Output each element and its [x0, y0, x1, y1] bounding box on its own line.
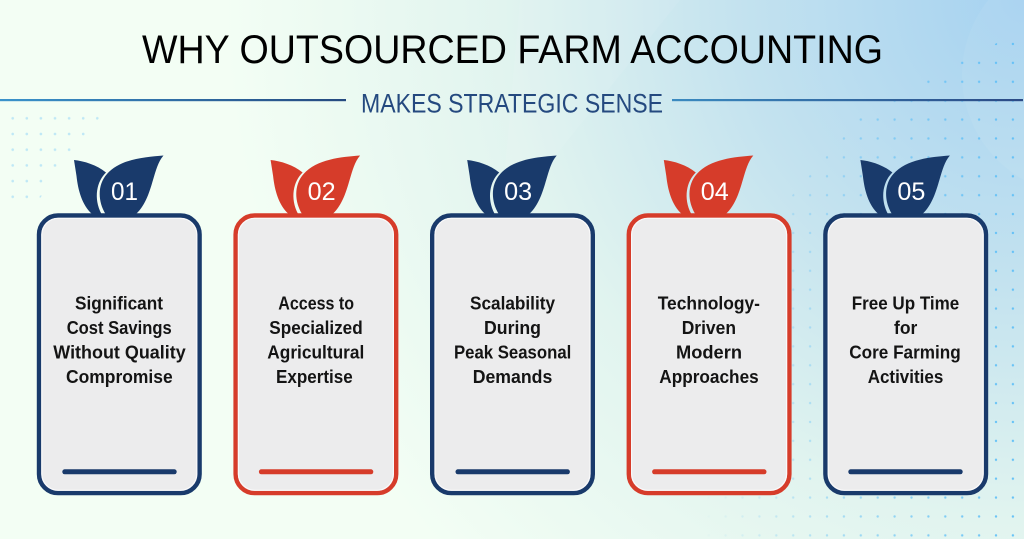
leaf icon 01: 01 — [111, 178, 138, 206]
accent bar — [652, 469, 766, 474]
card text: Access to — [278, 292, 354, 314]
accent bar — [62, 469, 177, 474]
card 1 — [39, 156, 200, 493]
card text: Technology- — [658, 292, 760, 314]
card text: During — [484, 317, 541, 338]
card text: Free Up Time — [852, 292, 959, 314]
leaf icon 05 — [860, 156, 950, 214]
card panel — [236, 216, 396, 493]
card text: Compromise — [66, 366, 173, 387]
leaf icon 03 — [467, 156, 557, 214]
card 2 — [236, 156, 396, 493]
card text: Activities — [868, 366, 943, 387]
card text: Expertise — [276, 366, 353, 387]
card panel — [629, 216, 789, 493]
subtitle with rules: MAKES STRATEGIC SENSE — [361, 88, 663, 118]
card 3 — [432, 156, 593, 493]
card 5 — [825, 156, 986, 493]
leaf icon 02 — [271, 156, 360, 214]
card text: Cost Savings — [67, 317, 172, 338]
card text: Specialized — [269, 317, 363, 338]
accent bar — [848, 469, 963, 474]
leaf icon 04 — [664, 156, 753, 214]
accent bar — [259, 469, 373, 474]
card text: Scalability — [470, 292, 556, 314]
card text — [658, 292, 760, 387]
leaf icon 05: 05 — [897, 178, 925, 206]
card text: Core Farming — [849, 342, 961, 362]
card panel — [39, 216, 200, 493]
card text: Driven — [682, 317, 736, 338]
leaf icon 04: 04 — [701, 178, 729, 206]
leaf icon 03: 03 — [504, 178, 532, 206]
card text: Peak Seasonal — [454, 342, 571, 362]
title: WHY OUTSOURCED FARM ACCOUNTING — [142, 28, 883, 72]
leaf icon 01 — [74, 156, 164, 214]
card text — [53, 292, 186, 387]
card panel — [825, 216, 986, 493]
card text — [267, 292, 364, 387]
card text: Approaches — [659, 366, 759, 387]
card text: Without Quality — [53, 342, 186, 362]
card text: Significant — [75, 292, 163, 314]
card text — [849, 292, 961, 387]
card text: for — [894, 317, 917, 338]
card text — [454, 292, 571, 387]
card text: Agricultural — [267, 342, 364, 362]
card panel — [432, 216, 593, 493]
leaf icon 02: 02 — [308, 178, 336, 206]
card 4 — [629, 156, 789, 493]
card text: Modern — [676, 342, 742, 362]
accent bar — [456, 469, 570, 474]
card text: Demands — [473, 366, 552, 387]
